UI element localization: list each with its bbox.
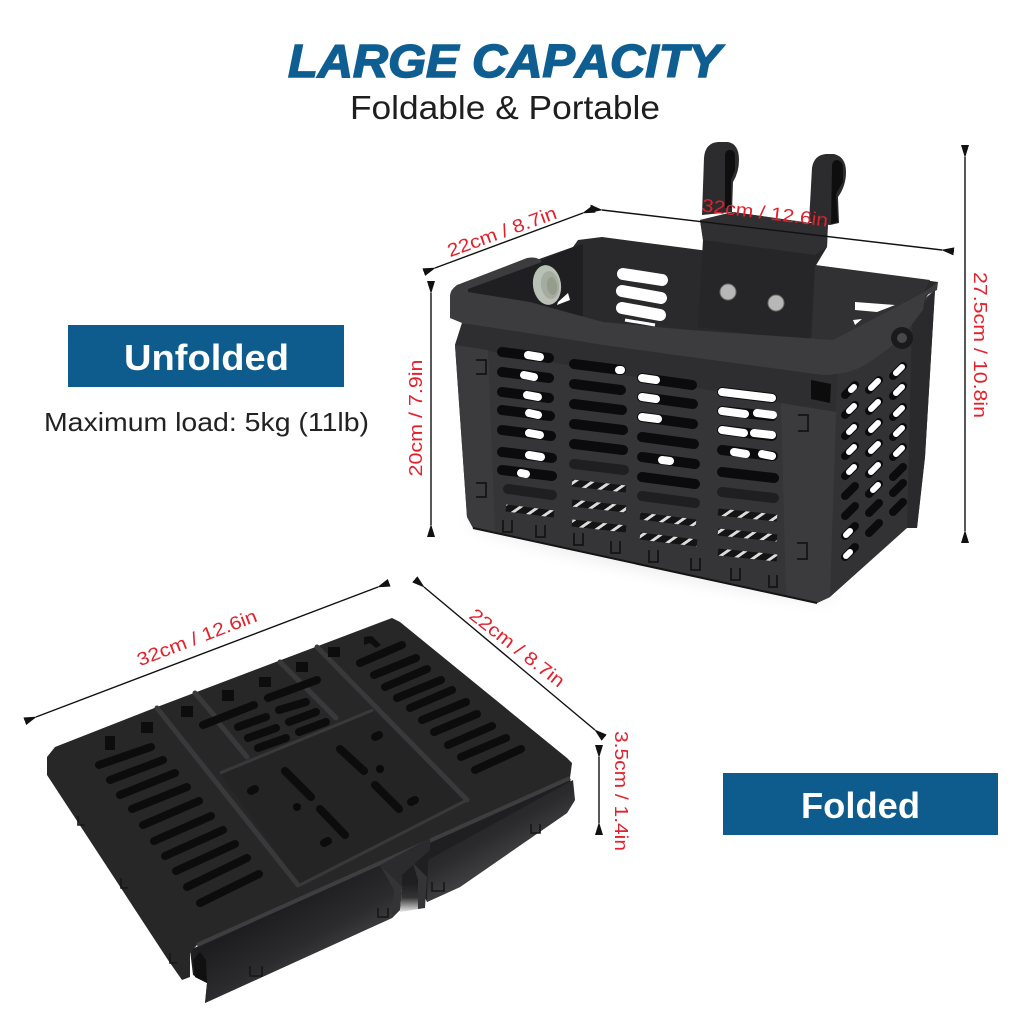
bolts (720, 284, 736, 300)
dimension: basket width (602, 194, 942, 250)
title: LARGE CAPACITY (288, 35, 726, 87)
centre panel slots (105, 636, 415, 843)
dimension: basket depth (435, 202, 583, 268)
bracket with hooks (698, 142, 846, 342)
lower folded section: right (427, 780, 575, 902)
rim (450, 258, 938, 375)
front slots column 2 (572, 364, 626, 529)
left slot column (99, 747, 259, 903)
dimension: folded width (36, 587, 378, 717)
dimension: folded width: 32cm / 12.6in (134, 605, 260, 670)
top plate (47, 618, 572, 980)
dimension: folded thickness: 3.5cm / 1.4in (611, 731, 632, 851)
subtitle: Foldable & Portable (350, 90, 660, 127)
basket photo: unfolded (450, 142, 938, 611)
centre panel ridges (157, 647, 570, 945)
right face (817, 290, 935, 603)
dimension: basket depth: 22cm / 8.7in (444, 202, 559, 261)
dimension: folded depth (424, 587, 595, 730)
centre hinge connector (380, 838, 430, 918)
small clips (78, 816, 540, 976)
panel: folded label (723, 773, 998, 835)
right face slots (845, 366, 903, 557)
front upper band (455, 323, 838, 412)
dimension: folded depth: 22cm / 8.7in (466, 604, 569, 691)
right lock (811, 327, 913, 403)
panel: unfolded label: Unfolded (124, 337, 289, 378)
dimension: folded thickness (599, 731, 632, 851)
back wall slots (557, 274, 895, 325)
basket clips and edges (473, 360, 817, 603)
folded basket photo (47, 618, 575, 1003)
lower folded section: left (193, 860, 402, 1003)
panel: unfolded label (68, 325, 344, 387)
dimension: basket total height: 27.5cm / 10.8in (970, 272, 991, 418)
lower folded section base (190, 770, 575, 1003)
text: maximum load: Maximum load: 5kg (11lb) (44, 407, 369, 437)
panel: folded label: Folded (801, 785, 920, 826)
right slot column (360, 645, 521, 770)
basket inner walls (468, 237, 938, 352)
front right pillar (781, 403, 836, 603)
front left pillar (455, 345, 495, 532)
dimension: basket body height: 20cm / 7.9in (405, 359, 426, 477)
dimension: basket width: 32cm / 12.6in (701, 194, 829, 231)
front slots column 1 (502, 352, 554, 514)
front slots column 3 (640, 378, 697, 543)
front slots column 4 (718, 392, 777, 558)
front wall (455, 323, 838, 603)
rubber knob (530, 263, 564, 307)
